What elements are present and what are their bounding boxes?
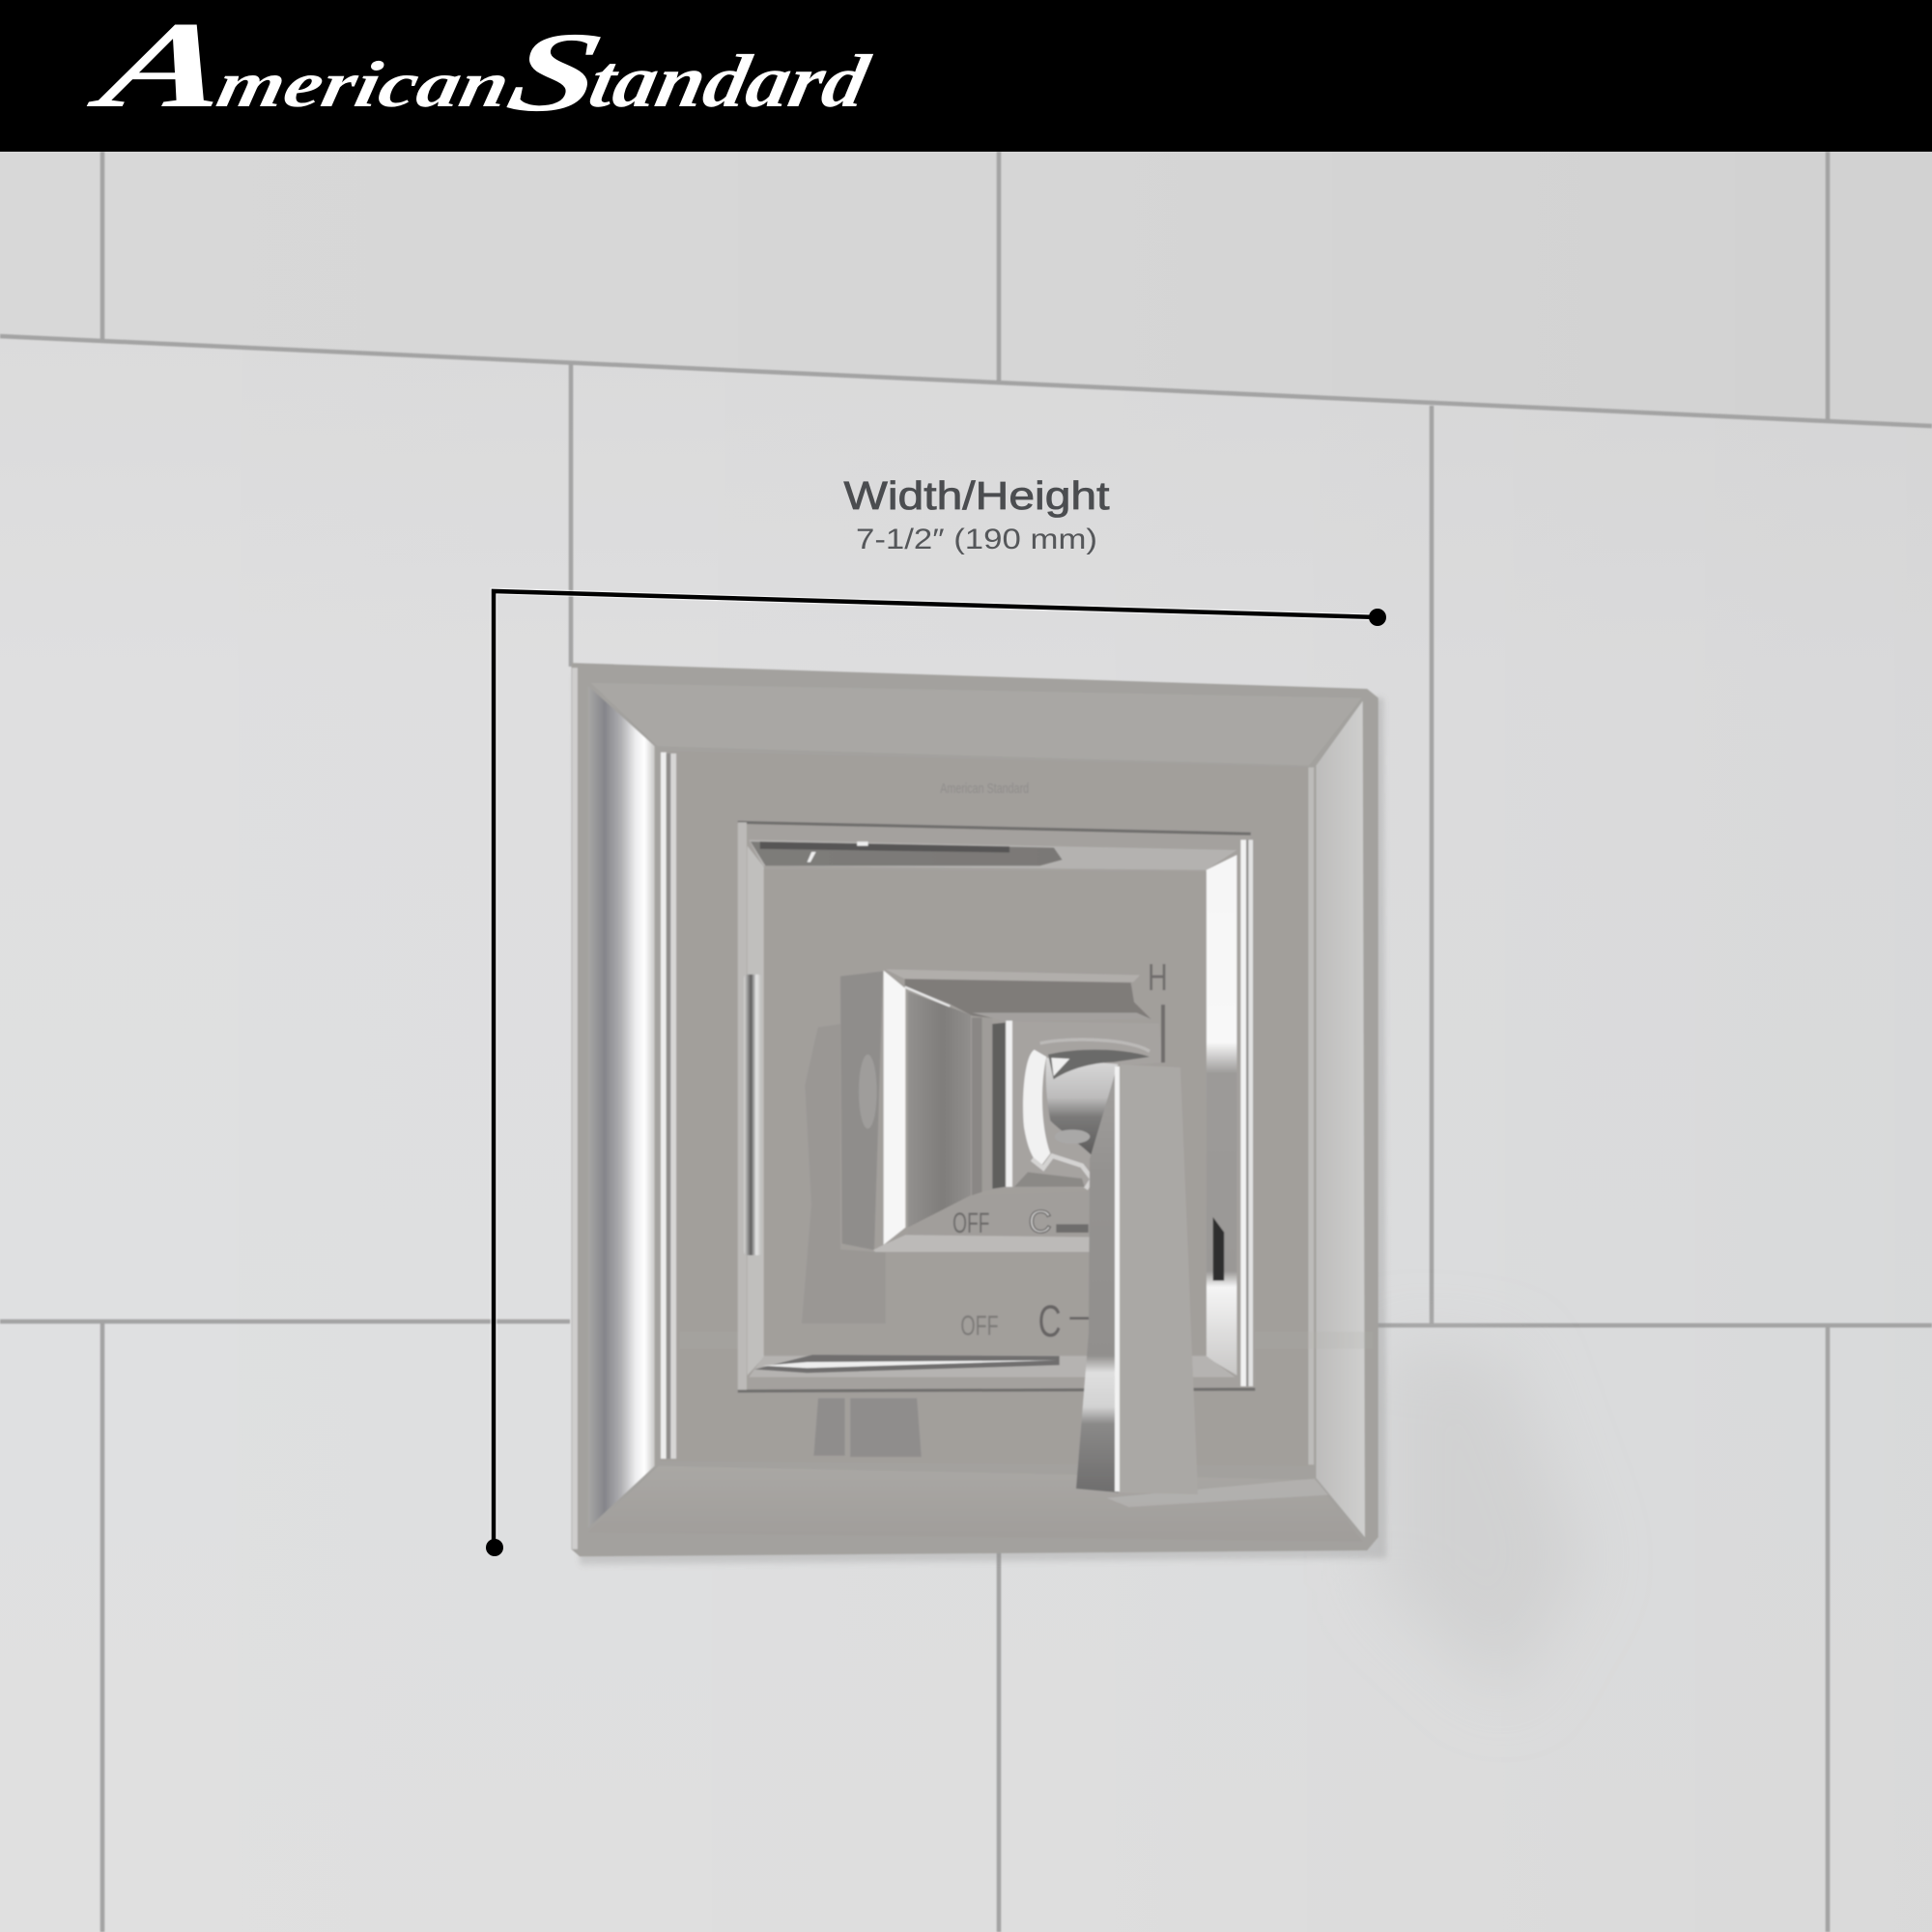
knob recess strips — [972, 1017, 1012, 1195]
H tick — [1161, 1005, 1165, 1063]
dimension label: Width/Height: 7-1/2″ (190 mm) — [856, 524, 1097, 555]
knob hub face — [1012, 1021, 1162, 1188]
lever highlight — [1115, 1066, 1120, 1492]
logo: American Standard: tandard — [582, 41, 877, 124]
knob top lower light — [973, 1012, 1151, 1021]
ball mid reflection — [1055, 1129, 1090, 1144]
reflected OFF and C — [952, 1205, 1089, 1240]
handle reflection on face — [802, 1024, 886, 1323]
reflected OFF and C: C — [1029, 1205, 1052, 1240]
inner recess left bevel — [748, 846, 764, 1376]
top bevel — [591, 683, 1362, 765]
plate left edge highlight — [572, 668, 578, 1549]
logo: American Standard: A — [80, 0, 243, 133]
knob top face — [905, 979, 1151, 1019]
dimension label: Width/Height — [844, 473, 1110, 555]
soft wall shadow beside plate — [1381, 1343, 1584, 1700]
ball white glint — [1051, 1058, 1069, 1076]
ball top dark crescent — [1048, 1050, 1150, 1079]
tile line reflection band — [680, 1332, 1373, 1349]
inner recess left light rim — [738, 822, 747, 1390]
valve trim plate — [572, 663, 1386, 1564]
tiny brand mark: American Standard — [940, 781, 1029, 797]
logo: American Standard: merican — [211, 48, 516, 121]
inner recess frame — [738, 823, 1255, 1391]
left strip highlight — [661, 753, 676, 1459]
dimension label: Width/Height: Width/Height — [844, 473, 1110, 518]
bracket end dot: width — [1369, 609, 1386, 626]
lever shaded facet — [1076, 1065, 1119, 1492]
chrome ball body — [1046, 1058, 1118, 1156]
knob bright edge — [884, 971, 905, 1245]
knob diagonal highlight — [905, 987, 950, 1007]
C tick — [1069, 1317, 1089, 1320]
knob bottom lip — [873, 1235, 1090, 1252]
knob side face — [840, 971, 883, 1250]
OFF mark: OFF — [960, 1311, 999, 1342]
inner recess right bevel — [1207, 855, 1236, 1376]
inner recess bottom bevel — [749, 1354, 1236, 1378]
left chrome bevel — [588, 686, 655, 1528]
logo: American Standard: S — [497, 9, 613, 135]
right strip highlight — [1308, 767, 1314, 1464]
inner recess top bevel — [749, 839, 1236, 870]
right bevel dark spot — [1213, 1217, 1224, 1281]
header bar — [0, 0, 1932, 152]
ball top rim — [1040, 1039, 1150, 1051]
inner recess right chrome strip — [1240, 839, 1253, 1386]
lever main face — [1119, 1065, 1198, 1494]
knob assembly — [802, 956, 1168, 1346]
left bevel chrome strip — [744, 975, 761, 1255]
right bevel — [1316, 701, 1365, 1537]
bottom bevel — [588, 1466, 1363, 1542]
inner center face — [764, 869, 1207, 1354]
bottom bevel reflection — [1106, 1479, 1328, 1507]
reflected OFF and C: OFF — [952, 1208, 989, 1239]
dimension bracket lines — [486, 591, 1386, 1556]
plate shadow — [574, 674, 1386, 1564]
ball lower outline — [1032, 1156, 1093, 1189]
knob bottom inner face — [908, 1191, 1090, 1236]
top light rim — [886, 969, 1140, 982]
bracket end dot: height — [486, 1539, 503, 1556]
H mark: H — [1148, 956, 1168, 999]
inner recess outer dark line — [738, 822, 1255, 1391]
inner panel — [660, 752, 1313, 1466]
logo: American Standard — [80, 0, 887, 135]
knob side oval reflection — [859, 1055, 877, 1128]
outer plate — [572, 663, 1378, 1556]
lever handle — [1076, 1065, 1198, 1494]
hub shadow base — [1014, 1172, 1085, 1187]
ball left crescent — [1023, 1050, 1050, 1166]
knob left inner face — [908, 992, 971, 1228]
lower reflection — [813, 1399, 922, 1457]
C mark: C — [1038, 1295, 1062, 1346]
